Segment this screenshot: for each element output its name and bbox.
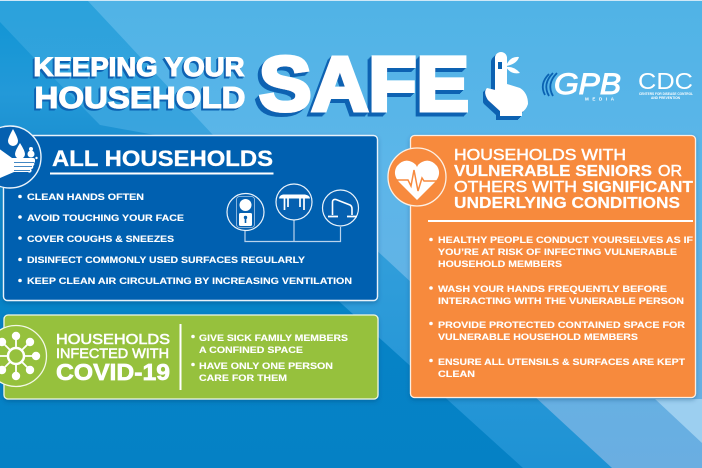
vulnerable bullet list: ENSURE ALL UTENSILS & SURFACES ARE KEPT <box>438 357 685 368</box>
vulnerable bullet list: HEALTHY PEOPLE CONDUCT YOURSELVES AS IF <box>438 235 693 246</box>
covid bullet list: GIVE SICK FAMILY MEMBERS <box>199 333 349 344</box>
heading: vulnerable households <box>454 147 693 212</box>
vulnerable bullet list: WASH YOUR HANDS FREQUENTLY BEFORE <box>438 284 668 295</box>
title small lines: KEEPING YOUR <box>34 52 244 82</box>
panel: all households <box>0 126 378 300</box>
vulnerable bullet list: VULNERABLE HOUSEHOLD MEMBERS <box>438 332 639 343</box>
vulnerable bullet list: CLEAN <box>438 369 475 380</box>
icon: washing hands <box>0 126 41 188</box>
icon: table <box>276 184 312 220</box>
logo: GPB Media: GPB <box>554 68 621 101</box>
logo: CDC: CENTERS FOR DISEASE CONTROL <box>639 92 693 96</box>
title small lines: HOUSEHOLD <box>34 80 245 115</box>
panel: households with vulnerable seniors <box>388 136 696 398</box>
icon group: commonly touched surfaces <box>227 184 358 242</box>
icon: handrail <box>322 190 358 226</box>
bullet list: DISINFECT COMMONLY USED SURFACES REGULARLY <box>27 255 306 266</box>
title small lines <box>34 52 245 115</box>
heading: all households: ALL HOUSEHOLDS <box>52 146 273 171</box>
logo: CDC: CDC <box>638 68 693 94</box>
panel: households infected with covid-19 <box>0 315 378 399</box>
vulnerable bullet list: PROVIDE PROTECTED CONTAINED SPACE FOR <box>438 320 685 331</box>
bullet list: KEEP CLEAN AIR CIRCULATING BY INCREASING VENTILATION <box>27 276 352 287</box>
heading: vulnerable households: HOUSEHOLDS WITH <box>454 147 626 164</box>
heading: vulnerable households: SIGNIFICANT <box>582 179 693 196</box>
icon: heart with pulse <box>388 148 446 206</box>
heading: households infected with covid-19: COVID-19 <box>56 359 170 385</box>
covid bullet list: A CONFINED SPACE <box>199 345 304 356</box>
heading: households infected with covid-19: INFECTED WITH <box>56 345 169 361</box>
icon: virus <box>0 326 46 386</box>
heading: vulnerable households: OR <box>658 163 682 180</box>
heading: households infected with covid-19 <box>56 331 170 385</box>
bullet list <box>18 192 352 287</box>
covid bullet list <box>191 333 349 384</box>
logo: CDC: AND PREVENTION <box>651 96 681 100</box>
bullet list: COVER COUGHS & SNEEZES <box>27 234 175 245</box>
covid bullet list: CARE FOR THEM <box>199 373 287 384</box>
bullet list: CLEAN HANDS OFTEN <box>27 192 144 203</box>
vulnerable bullet list: YOU’RE AT RISK OF INFECTING VULNERABLE <box>438 247 678 258</box>
logo: GPB Media: MEDIA <box>585 96 615 102</box>
icon: door knob <box>227 194 264 230</box>
title: keeping your household safe <box>34 42 469 128</box>
covid bullet list: HAVE ONLY ONE PERSON <box>199 361 333 372</box>
vulnerable bullet list: HOUSEHOLD MEMBERS <box>438 259 563 270</box>
heading: vulnerable households: UNDERLYING CONDITIONS <box>454 195 680 212</box>
heading: vulnerable households: OTHERS WITH <box>454 179 577 196</box>
title word: SAFE: SAFE <box>259 42 469 128</box>
vulnerable bullet list <box>429 235 693 380</box>
heading: vulnerable households: VULNERABLE SENIORS <box>454 163 652 180</box>
heading: households infected with covid-19: HOUSEHOLDS <box>56 331 170 348</box>
vulnerable bullet list: INTERACTING WITH THE VUNERABLE PERSON <box>438 296 684 307</box>
bullet list: AVOID TOUCHING YOUR FACE <box>27 213 185 224</box>
icon: hand with string on finger <box>485 52 528 116</box>
